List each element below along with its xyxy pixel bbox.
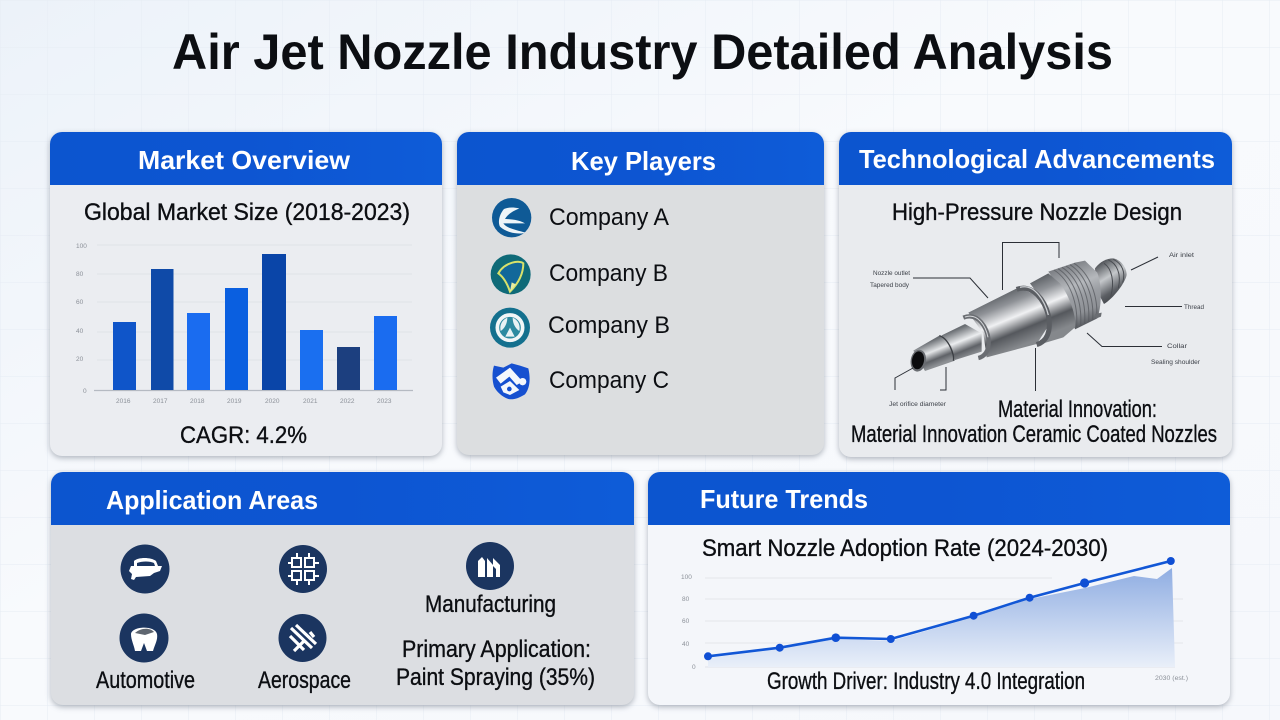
callout: primary application: Paint Spraying (35%) [396,664,595,691]
data points [704,557,1175,660]
part labels: Air inlet [1169,252,1194,259]
icon: vehicle [120,544,170,594]
company A name: Company A [549,204,669,231]
line chart: 2030 (est.) [1155,675,1188,682]
header: market overview: Market Overview [138,145,351,175]
title: Air Jet Nozzle Industry Detailed Analysis [172,24,1113,80]
header: application areas: Application Areas [106,485,318,515]
text: material innovation label: Material Innovation: [998,396,1157,423]
bar chart: 2017 [153,398,168,405]
icon: automotive part [120,614,168,662]
header: key players [457,132,824,185]
diagram: nozzle with leader lines [870,242,1204,408]
part labels: Sealing shoulder [1151,359,1201,366]
second company B name: Company B [548,312,670,339]
panel: market overview [50,132,442,456]
leader lines [895,242,1182,391]
bar chart: 100 [76,243,87,250]
line chart: 60 [682,618,690,625]
label: manufacturing: Manufacturing [425,591,556,618]
area fill [708,568,1175,667]
trend line [708,561,1171,656]
bar chart: 0 [83,388,87,395]
header: technological advancements [839,132,1232,185]
bar chart: 2020 [265,398,280,405]
header: key players: Key Players [571,146,716,176]
header: market overview [50,132,442,185]
icon: company B logo [491,254,531,294]
bar chart: 2019 [227,398,242,405]
line chart: 100 [681,574,692,581]
icon: second company B logo [490,308,530,348]
callout: CAGR: CAGR: 4.2% [180,422,307,449]
header: technological advancements: Technological Advancements [859,144,1215,174]
panel: future trends [648,472,1230,705]
line chart [681,557,1188,682]
bar chart: 2016 [116,398,131,405]
part labels: Jet orifice diameter [889,401,947,408]
bar chart: 2021 [303,398,318,405]
nozzle body [909,258,1127,373]
icon: company A logo [492,198,531,237]
heading: smart nozzle adoption rate: Smart Nozzle Adoption Rate (2024-2030) [702,535,1108,562]
header: application areas [51,472,634,525]
company B name: Company B [549,260,668,287]
bar chart: 80 [76,271,84,278]
bar chart: 40 [76,328,84,335]
header: future trends [648,472,1230,525]
bar chart: 2022 [340,398,355,405]
part labels: Collar [1167,343,1188,350]
panel: application areas [51,472,634,705]
heading: high-pressure nozzle design: High-Pressure Nozzle Design [892,199,1182,226]
header: future trends: Future Trends [700,484,868,514]
bar chart: 20 [76,356,84,363]
line chart: 80 [682,596,690,603]
icon: factory [466,542,514,590]
heading: global market size: Global Market Size (2018-2023) [84,199,410,226]
part labels: Nozzle outlet [873,270,910,277]
callout: primary application [396,636,595,691]
callout: growth driver: Growth Driver: Industry 4.0 Integration [767,668,1085,695]
label: automotive: Automotive [96,667,195,694]
bar chart [76,243,413,405]
line chart: 0 [692,664,696,671]
panel: technological advancements [839,132,1232,457]
icon: company C logo [492,363,530,399]
bar chart: 2018 [190,398,205,405]
part labels: Thread [1184,304,1204,311]
line chart: 40 [682,641,690,648]
part labels: Tapered body [870,282,910,289]
bar chart: 2023 [377,398,392,405]
panel: key players [457,132,824,455]
label: aerospace: Aerospace [258,667,351,694]
callout: primary application: Primary Application: [402,636,591,663]
icon: circuit grid [279,545,327,593]
company C name: Company C [549,367,669,394]
bar chart: 60 [76,299,84,306]
part labels [870,252,1204,408]
icon: aerospace [278,614,326,662]
